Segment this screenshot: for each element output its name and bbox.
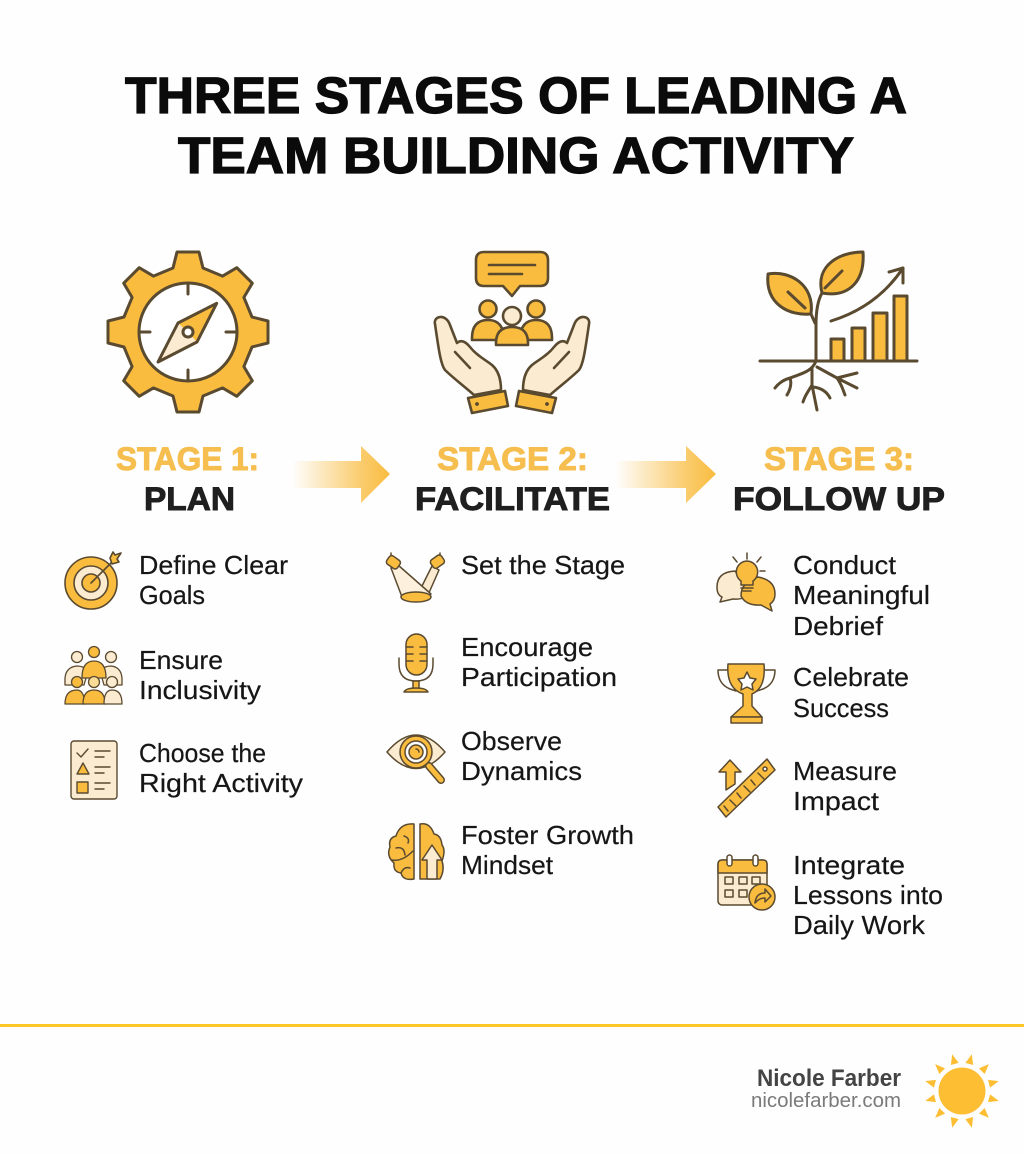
icon: hands holding team with speech bubble bbox=[435, 252, 589, 413]
footer brand text: nicolefarber.com bbox=[751, 1090, 901, 1112]
heading: stage 1: STAGE 1: bbox=[116, 441, 259, 477]
footer brand text bbox=[751, 1065, 901, 1112]
heading: stage 2: FACILITATE bbox=[415, 481, 610, 517]
text: conduct meaningful debrief: Meaningful bbox=[793, 580, 930, 610]
icon: plant with growth chart bbox=[760, 252, 917, 410]
icon: spotlights bbox=[385, 553, 446, 602]
icon: group of people bbox=[65, 646, 122, 704]
text: measure impact bbox=[793, 756, 897, 816]
text: conduct meaningful debrief: Debrief bbox=[793, 611, 884, 641]
text: foster growth mindset bbox=[461, 820, 634, 880]
text: celebrate success: Success bbox=[793, 693, 889, 723]
text: conduct meaningful debrief bbox=[793, 550, 930, 641]
text: choose the right activity: Right Activity bbox=[139, 768, 303, 798]
text: observe dynamics: Observe bbox=[461, 726, 562, 756]
icon: checklist bbox=[71, 741, 117, 799]
text: foster growth mindset: Foster Growth bbox=[461, 820, 634, 850]
text: choose the right activity: Choose the bbox=[139, 738, 266, 768]
icon: sun logo bbox=[924, 1053, 1000, 1129]
icon: ruler with up arrow bbox=[718, 759, 775, 817]
footer brand text: Nicole Farber bbox=[757, 1065, 901, 1092]
heading: stage 3: STAGE 3: bbox=[764, 441, 914, 477]
text: ensure inclusivity bbox=[139, 645, 261, 705]
icon: speech bubbles with light bulb bbox=[717, 553, 775, 611]
arrow: stage 1 to stage 2 bbox=[292, 446, 390, 503]
footer rule bbox=[0, 1024, 1024, 1027]
text: celebrate success bbox=[793, 662, 909, 723]
arrow: stage 2 to stage 3 bbox=[615, 446, 716, 503]
title: TEAM BUILDING ACTIVITY bbox=[178, 127, 854, 184]
text: define clear goals: Define Clear bbox=[139, 550, 288, 580]
icon: target bbox=[65, 552, 121, 609]
heading: stage 2: STAGE 2: bbox=[437, 441, 588, 477]
text: define clear goals: Goals bbox=[139, 580, 205, 610]
text: define clear goals bbox=[139, 550, 288, 610]
text: encourage participation: Participation bbox=[461, 662, 617, 692]
heading: stage 3 bbox=[733, 441, 945, 517]
heading: stage 2 bbox=[415, 441, 610, 517]
text: set the stage: Set the Stage bbox=[461, 550, 625, 580]
text: celebrate success: Celebrate bbox=[793, 662, 909, 692]
text: choose the right activity bbox=[139, 738, 303, 798]
text: observe dynamics: Dynamics bbox=[461, 756, 582, 786]
heading: stage 1 bbox=[116, 441, 259, 517]
text: foster growth mindset: Mindset bbox=[461, 850, 554, 880]
icon: gear with compass bbox=[108, 252, 268, 412]
text: encourage participation bbox=[461, 632, 617, 692]
icon: brain with up arrow bbox=[389, 824, 444, 879]
title bbox=[125, 67, 907, 184]
text: integrate lessons into daily work: Integrate bbox=[793, 850, 905, 880]
icon: calendar with share arrow bbox=[718, 855, 775, 910]
icon: eye with magnifier bbox=[387, 735, 445, 780]
icon: microphone bbox=[399, 634, 433, 692]
text: measure impact: Measure bbox=[793, 756, 897, 786]
title: THREE STAGES OF LEADING A bbox=[125, 67, 907, 124]
text: conduct meaningful debrief: Conduct bbox=[793, 550, 897, 580]
text: observe dynamics bbox=[461, 726, 582, 786]
text: integrate lessons into daily work bbox=[793, 850, 943, 940]
text: ensure inclusivity: Ensure bbox=[139, 645, 223, 675]
icon: trophy bbox=[718, 664, 775, 723]
text: encourage participation: Encourage bbox=[461, 632, 593, 662]
text: integrate lessons into daily work: Lessons into bbox=[793, 880, 943, 910]
heading: stage 3: FOLLOW UP bbox=[733, 481, 945, 517]
text: ensure inclusivity: Inclusivity bbox=[139, 675, 261, 705]
text: measure impact: Impact bbox=[793, 786, 880, 816]
text: integrate lessons into daily work: Daily Work bbox=[793, 910, 926, 940]
heading: stage 1: PLAN bbox=[144, 481, 235, 517]
